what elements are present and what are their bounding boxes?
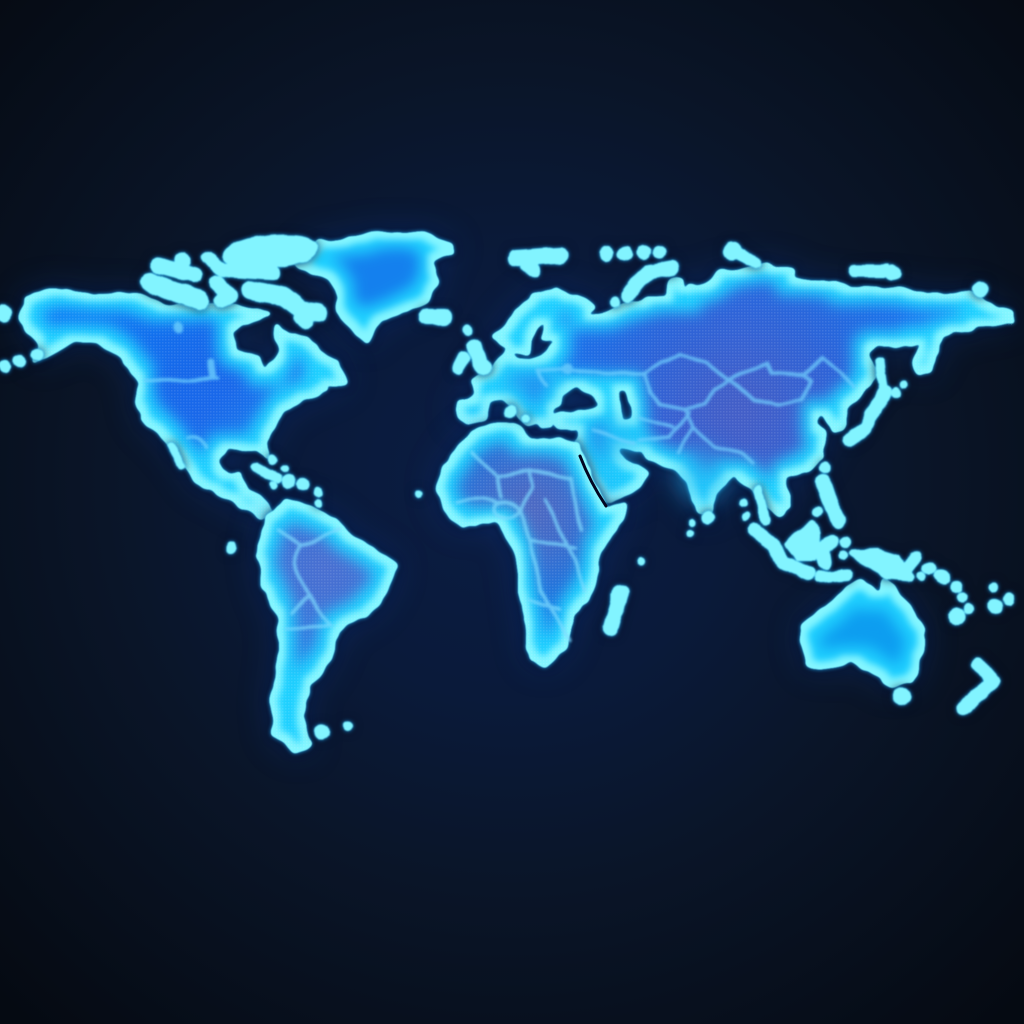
continent: Africa (437, 425, 628, 667)
islands: Melanesia (918, 562, 1014, 626)
continent: South America (258, 503, 395, 752)
continent: North America (22, 290, 347, 518)
continent: Australia (802, 580, 923, 685)
Red Sea (580, 456, 606, 506)
islands (0, 239, 1014, 740)
country borders: Africa (457, 452, 585, 640)
island: Baja California (171, 445, 181, 466)
country borders: Asia (538, 355, 853, 463)
islands: North Atlantic (427, 255, 560, 368)
continent: Greenland (295, 233, 453, 340)
islands: Madagascar and Mediterranean (507, 409, 621, 628)
islands: Japan and Sakhalin (849, 362, 906, 440)
islands: New Zealand (963, 664, 993, 708)
islands: Alaska chain and Pacific dots (0, 252, 645, 740)
islands: Russian Arctic (600, 242, 989, 307)
island: Tasmania (893, 687, 911, 705)
islands: Caribbean (255, 455, 323, 507)
islands: Arctic Canada (150, 239, 318, 323)
regional tint: India and Middle East (498, 371, 726, 501)
continent: Eurasia (459, 263, 1014, 517)
islands: South and Southeast Asia (688, 467, 915, 578)
